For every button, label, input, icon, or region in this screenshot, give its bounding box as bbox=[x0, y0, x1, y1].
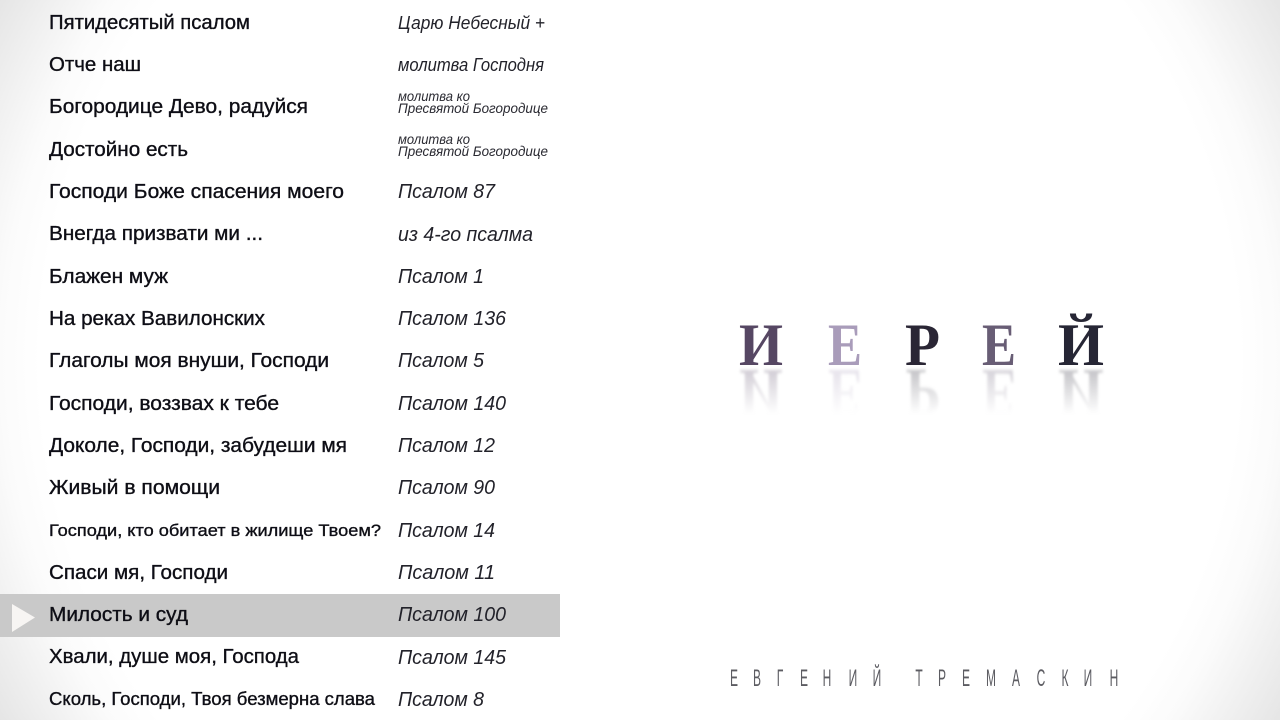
track sources: из 4-го псалма bbox=[398, 224, 533, 246]
track titles: Сколь, Господи, Твоя безмерна слава bbox=[49, 689, 376, 709]
track sources: Псалом 1 bbox=[398, 266, 484, 288]
track sources: Псалом 87 bbox=[398, 181, 496, 203]
title reflection: Е bbox=[982, 355, 1016, 432]
track sources: молитва ко bbox=[398, 88, 470, 104]
track sources: Псалом 140 bbox=[398, 393, 506, 415]
title letters bbox=[739, 312, 1104, 378]
track sources: Псалом 145 bbox=[398, 647, 507, 669]
track sources: Псалом 14 bbox=[398, 520, 495, 542]
track titles: Господи Боже спасения моего bbox=[49, 181, 344, 203]
track sources: Псалом 136 bbox=[398, 308, 507, 330]
track titles: Достойно есть bbox=[49, 139, 188, 161]
track sources: Пресвятой Богородице bbox=[398, 143, 548, 159]
album title with reflection bbox=[730, 312, 1115, 450]
track titles: Блажен муж bbox=[49, 266, 169, 288]
track sources bbox=[398, 13, 548, 711]
track titles: На реках Вавилонских bbox=[49, 308, 265, 330]
track sources: Псалом 100 bbox=[398, 604, 506, 626]
title letters: И bbox=[739, 312, 783, 378]
highlighted track band bbox=[0, 594, 560, 637]
title letters: Й bbox=[1058, 312, 1104, 378]
title reflection bbox=[730, 355, 1115, 450]
track titles: Милость и суд bbox=[49, 604, 188, 626]
title reflection: Е bbox=[828, 355, 862, 432]
title letters: Р bbox=[905, 312, 940, 378]
track sources: Псалом 5 bbox=[398, 350, 485, 372]
title letters: Е bbox=[828, 312, 862, 378]
track titles: Спаси мя, Господи bbox=[49, 562, 228, 584]
title reflection: Й bbox=[1058, 355, 1104, 432]
icon: play arrow bbox=[12, 604, 35, 632]
track titles bbox=[49, 12, 381, 709]
title reflection: И bbox=[739, 355, 783, 432]
artist name: ЕВГЕНИЙТРЕМАСКИН bbox=[730, 664, 1118, 692]
track sources: Псалом 90 bbox=[398, 477, 495, 499]
track sources: Царю Небесный + bbox=[398, 13, 545, 33]
track sources: Псалом 8 bbox=[398, 689, 484, 711]
track sources: молитва Господня bbox=[398, 55, 544, 75]
track sources: Пресвятой Богородице bbox=[398, 100, 548, 116]
track sources: Псалом 11 bbox=[398, 562, 495, 584]
track sources: молитва ко bbox=[398, 131, 470, 147]
track titles: Пятидесятый псалом bbox=[49, 12, 250, 34]
track titles: Господи, кто обитает в жилище Твоем? bbox=[49, 521, 381, 540]
track titles: Живый в помощи bbox=[49, 477, 220, 499]
track titles: Господи, воззвах к тебе bbox=[49, 393, 279, 415]
title letters: Е bbox=[982, 312, 1016, 378]
track titles: Внегда призвати ми ... bbox=[49, 223, 263, 245]
track titles: Хвали, душе моя, Господа bbox=[49, 646, 300, 668]
title reflection: Р bbox=[905, 355, 940, 432]
track titles: Глаголы моя внуши, Господи bbox=[49, 350, 329, 372]
track sources: Псалом 12 bbox=[398, 435, 495, 457]
track titles: Отче наш bbox=[49, 54, 141, 76]
track titles: Богородице Дево, радуйся bbox=[49, 96, 308, 118]
track titles: Доколе, Господи, забудеши мя bbox=[49, 435, 347, 457]
